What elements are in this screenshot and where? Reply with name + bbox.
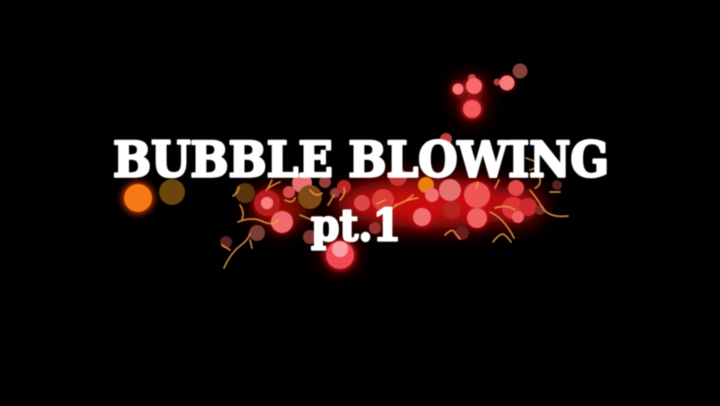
subtitle: pt.1: pt.1: [311, 200, 401, 252]
orange sparkle strands: [222, 158, 568, 268]
bubbles: central cluster: [220, 168, 562, 269]
bubble glows: [122, 76, 525, 270]
bubbles: upper right cluster: [440, 64, 528, 145]
title: BUBBLE BLOWING: BUBBLE BLOWING: [113, 130, 609, 188]
red glow cloud: [252, 79, 541, 267]
bubbles: left orange pair: [124, 179, 185, 212]
